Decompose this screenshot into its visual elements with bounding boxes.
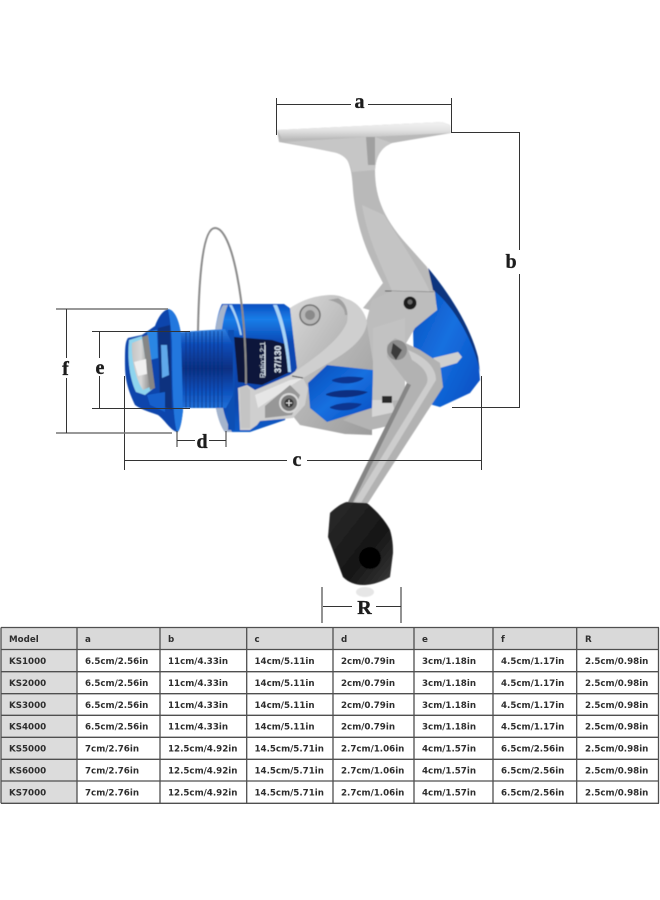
- header row: c: [254, 635, 260, 645]
- specification table: [1, 628, 659, 804]
- row KS3000: 6.5cm/2.56in: [85, 701, 148, 711]
- row KS6000: 6.5cm/2.56in: [501, 766, 564, 776]
- row KS1000: 2.5cm/0.98in: [585, 657, 648, 667]
- row KS5000: 4cm/1.57in: [422, 744, 476, 754]
- right silver gear housing: [370, 318, 405, 410]
- dimension R: R: [357, 597, 372, 619]
- row KS2000: 14cm/5.11in: [254, 679, 315, 689]
- header row: b: [168, 635, 174, 645]
- silver dome rotor arm: [280, 295, 373, 435]
- row KS2000: 2cm/0.79in: [341, 679, 395, 689]
- dimension d: d: [196, 431, 208, 453]
- row KS6000: 7cm/2.76in: [85, 766, 139, 776]
- header row: R: [585, 635, 592, 645]
- header row: Model: [9, 635, 39, 645]
- row KS3000: [9, 701, 648, 711]
- dimension e: e: [96, 357, 105, 379]
- row KS4000: [9, 722, 648, 732]
- threaded spool body: [178, 329, 233, 408]
- table grid: [1, 628, 659, 803]
- header row: [9, 635, 592, 645]
- table shading: [1, 628, 658, 804]
- row KS4000: 3cm/1.18in: [422, 722, 476, 732]
- row KS6000: [9, 766, 648, 776]
- header row: d: [341, 635, 347, 645]
- dimension f: f: [62, 358, 69, 380]
- row KS7000: 6.5cm/2.56in: [501, 788, 564, 798]
- row KS5000: KS5000: [9, 744, 46, 754]
- row KS4000: 2.5cm/0.98in: [585, 722, 648, 732]
- rotor text: [258, 342, 283, 378]
- row KS2000: 11cm/4.33in: [168, 679, 228, 689]
- row KS1000: 2cm/0.79in: [341, 657, 395, 667]
- row KS1000: 11cm/4.33in: [168, 657, 228, 667]
- handle arm: [348, 338, 443, 503]
- row KS4000: 14cm/5.11in: [254, 722, 315, 732]
- row KS7000: 7cm/2.76in: [85, 788, 139, 798]
- row KS7000: 12.5cm/4.92in: [168, 788, 237, 798]
- row KS5000: 7cm/2.76in: [85, 744, 139, 754]
- dimension c: [124, 376, 482, 471]
- row KS1000: 6.5cm/2.56in: [85, 657, 148, 667]
- row KS7000: KS7000: [9, 788, 46, 798]
- row KS4000: 11cm/4.33in: [168, 722, 228, 732]
- row KS1000: KS1000: [9, 657, 46, 667]
- row KS7000: [9, 788, 648, 798]
- row KS2000: KS2000: [9, 679, 46, 689]
- row KS2000: 2.5cm/0.98in: [585, 679, 648, 689]
- dimension b: b: [505, 251, 517, 273]
- row KS4000: 4.5cm/1.17in: [501, 722, 564, 732]
- row KS5000: 14.5cm/5.71in: [254, 744, 324, 754]
- lower gear plate: [343, 400, 398, 430]
- silver bail arm: [238, 298, 367, 430]
- row KS5000: 12.5cm/4.92in: [168, 744, 237, 754]
- row KS6000: 4cm/1.57in: [422, 766, 476, 776]
- row KS5000: 2.5cm/0.98in: [585, 744, 648, 754]
- arm screw: [279, 393, 299, 413]
- row KS3000: 11cm/4.33in: [168, 701, 228, 711]
- dimension d: [177, 431, 226, 453]
- row KS5000: 6.5cm/2.56in: [501, 744, 564, 754]
- row KS1000: 3cm/1.18in: [422, 657, 476, 667]
- dimension R: [322, 587, 401, 623]
- row KS3000: 2.5cm/0.98in: [585, 701, 648, 711]
- reel foot and stem: [277, 122, 451, 320]
- dimension a: [276, 91, 452, 135]
- bail wire rear leg: [198, 228, 215, 331]
- rotor cup with label band: [213, 304, 300, 432]
- dimension e: [92, 331, 190, 408]
- row KS6000: 14.5cm/5.71in: [254, 766, 324, 776]
- spool flange and nose: [125, 309, 183, 432]
- row KS6000: KS6000: [9, 766, 46, 776]
- bail wire front leg: [215, 228, 246, 384]
- row KS6000: 2.7cm/1.06in: [341, 766, 404, 776]
- row KS3000: 14cm/5.11in: [254, 701, 315, 711]
- rear blue housing: [413, 268, 480, 407]
- knob reflection: [356, 587, 374, 597]
- row KS7000: 14.5cm/5.71in: [254, 788, 324, 798]
- row KS2000: 6.5cm/2.56in: [85, 679, 148, 689]
- row KS2000: 3cm/1.18in: [422, 679, 476, 689]
- row KS6000: 2.5cm/0.98in: [585, 766, 648, 776]
- row KS7000: 2.5cm/0.98in: [585, 788, 648, 798]
- spool rear disc blue edge: [228, 330, 235, 430]
- row KS3000: KS3000: [9, 701, 46, 711]
- blue side plate with slots: [308, 365, 373, 422]
- rotor text: 37/130: [273, 345, 283, 373]
- row KS1000: [9, 657, 648, 667]
- dimension f: [56, 309, 172, 433]
- dimension c: c: [293, 449, 302, 471]
- row KS5000: [9, 744, 648, 754]
- row KS3000: 2cm/0.79in: [341, 701, 395, 711]
- row KS7000: 4cm/1.57in: [422, 788, 476, 798]
- row KS6000: 12.5cm/4.92in: [168, 766, 237, 776]
- rear body silver and screw: [360, 291, 437, 410]
- row KS1000: 14cm/5.11in: [254, 657, 315, 667]
- header row: e: [422, 635, 428, 645]
- row KS3000: 4.5cm/1.17in: [501, 701, 564, 711]
- row KS4000: 2cm/0.79in: [341, 722, 395, 732]
- dimension a: a: [354, 91, 364, 113]
- header row: a: [85, 635, 91, 645]
- rotor text: Ratio:5.2:1: [258, 342, 267, 378]
- gear detail: [372, 400, 395, 417]
- row KS1000: 4.5cm/1.17in: [501, 657, 564, 667]
- row KS5000: 2.7cm/1.06in: [341, 744, 404, 754]
- row KS2000: [9, 679, 648, 689]
- dimension b: [451, 132, 520, 408]
- header row: f: [501, 635, 505, 645]
- row KS4000: 6.5cm/2.56in: [85, 722, 148, 732]
- fishing reel photo illustration: [125, 122, 480, 597]
- row KS4000: KS4000: [9, 722, 46, 732]
- row KS7000: 2.7cm/1.06in: [341, 788, 404, 798]
- row KS3000: 3cm/1.18in: [422, 701, 476, 711]
- handle knob: [328, 502, 393, 585]
- row KS2000: 4.5cm/1.17in: [501, 679, 564, 689]
- spool end cap: [128, 335, 155, 395]
